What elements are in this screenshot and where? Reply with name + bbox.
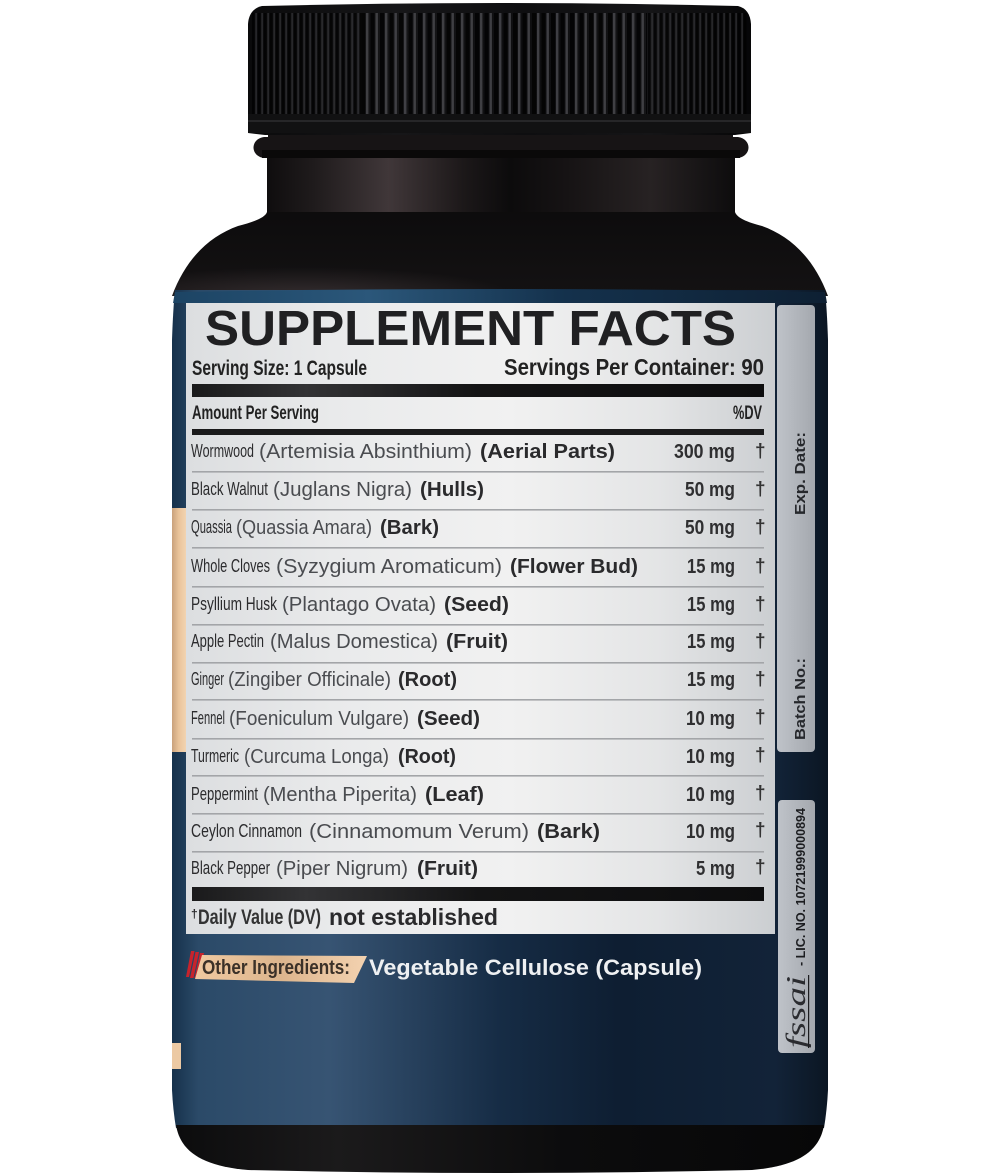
row: wormwood: [191, 441, 766, 463]
row: black pepper: (Piper Nigrum): [276, 858, 408, 880]
row: fennel: 10 mg: [686, 708, 735, 730]
row: ceylon cinnamon: 10 mg: [686, 821, 735, 843]
servings per container: Servings Per Container: 90: [504, 354, 764, 380]
footnote: Daily Value (DV): [198, 906, 321, 929]
row: ginger: [191, 669, 766, 691]
row: ceylon cinnamon: †: [755, 820, 766, 841]
row: fennel: [191, 707, 766, 730]
heavy rule: [192, 384, 764, 397]
row: ginger: (Root): [398, 669, 457, 691]
row: apple pectin: (Malus Domestica): [270, 631, 438, 653]
row: wormwood: 300 mg: [674, 441, 735, 463]
row: fennel: †: [755, 707, 766, 728]
row: black walnut: (Hulls): [420, 479, 484, 501]
other ingredients value: Vegetable Cellulose (Capsule): [369, 955, 702, 980]
other ingredients: [186, 951, 702, 983]
footnote: †: [191, 907, 198, 921]
percent daily value heading: %DV: [733, 403, 762, 424]
row: quassia: (Bark): [380, 517, 439, 539]
row: ceylon cinnamon: Ceylon Cinnamon: [191, 821, 302, 841]
row: peppermint: (Mentha Piperita): [263, 784, 417, 806]
row: whole cloves: 15 mg: [687, 556, 735, 578]
row: wormwood: (Artemisia Absinthium): [259, 441, 472, 463]
bottle body: [172, 289, 828, 1128]
row: black walnut: 50 mg: [685, 479, 735, 501]
bottle neck: [254, 132, 748, 212]
row: apple pectin: †: [755, 631, 766, 652]
footnote: [191, 904, 498, 930]
fssai logo: fssai: [781, 976, 811, 1048]
fssai logo: [781, 975, 811, 1048]
heavy rule bottom: [192, 887, 764, 901]
medium rule: [192, 429, 764, 435]
row: black walnut: [191, 479, 766, 501]
row: turmeric: [191, 745, 766, 768]
row: ginger: Ginger: [191, 669, 224, 689]
row: turmeric: 10 mg: [686, 746, 735, 768]
row: whole cloves: (Syzygium Aromaticum): [276, 556, 502, 578]
row: whole cloves: [191, 556, 766, 578]
other ingredients label: Other Ingredients:: [202, 957, 350, 979]
row: black pepper: †: [755, 857, 766, 878]
row: quassia: (Quassia Amara): [236, 517, 372, 539]
row: ginger: (Zingiber Officinale): [228, 669, 391, 691]
row: whole cloves: †: [755, 556, 766, 577]
row: quassia: [191, 517, 766, 539]
row: apple pectin: Apple Pectin: [191, 631, 264, 651]
panel: supplement facts label: [186, 302, 775, 934]
panel: fssai licence: [778, 800, 815, 1053]
row: wormwood: †: [755, 441, 766, 462]
batch number: Batch No.:: [792, 658, 809, 740]
expiry date: Exp. Date:: [792, 432, 809, 515]
row: apple pectin: [191, 631, 766, 653]
licence number: - LIC. NO. 10721999000894: [793, 807, 808, 966]
row: wormwood: (Aerial Parts): [480, 441, 615, 463]
row: ceylon cinnamon: [191, 820, 766, 843]
serving size: Serving Size: 1 Capsule: [192, 357, 367, 380]
panel: batch and expiry: [777, 305, 815, 752]
row: peppermint: [191, 783, 766, 806]
row: fennel: (Seed): [417, 708, 480, 730]
row: apple pectin: 15 mg: [687, 631, 735, 653]
row: peppermint: 10 mg: [686, 784, 735, 806]
row: peppermint: Peppermint: [191, 784, 258, 804]
row: ginger: 15 mg: [687, 669, 735, 691]
row: psyllium husk: Psyllium Husk: [191, 594, 278, 614]
bottle shoulder: [172, 205, 828, 296]
row: turmeric: Turmeric: [191, 746, 239, 766]
row: wormwood: Wormwood: [191, 441, 254, 461]
row: fennel: Fennel: [191, 708, 225, 728]
row: quassia: †: [755, 517, 766, 538]
row: whole cloves: Whole Cloves: [191, 556, 270, 576]
title: SUPPLEMENT FACTS: [205, 302, 736, 356]
row: ginger: †: [755, 669, 766, 690]
row: black pepper: (Fruit): [417, 858, 478, 880]
row: turmeric: †: [755, 745, 766, 766]
row: black pepper: Black Pepper: [191, 858, 270, 878]
tag background: [195, 955, 367, 983]
row: quassia: 50 mg: [685, 517, 735, 539]
bottle: [172, 3, 828, 1173]
row: peppermint: †: [755, 783, 766, 804]
row: black pepper: 5 mg: [696, 858, 735, 880]
row: psyllium husk: †: [755, 594, 766, 615]
bottle base: [176, 1125, 824, 1173]
row: black pepper: [191, 857, 766, 880]
row: turmeric: (Curcuma Longa): [244, 746, 389, 768]
peach strip upper: [172, 508, 186, 752]
row: black walnut: †: [755, 479, 766, 500]
row: turmeric: (Root): [398, 746, 456, 768]
amount per serving: Amount Per Serving: [192, 403, 319, 424]
icon: red slashes: [186, 951, 204, 978]
row: whole cloves: (Flower Bud): [510, 556, 638, 578]
row: psyllium husk: [191, 594, 766, 616]
row: ceylon cinnamon: (Cinnamomum Verum): [309, 821, 529, 843]
row: psyllium husk: 15 mg: [687, 594, 735, 616]
footnote: not established: [329, 904, 498, 930]
row: psyllium husk: (Plantago Ovata): [282, 594, 436, 616]
bottle cap: [248, 3, 751, 135]
peach strip lower: [172, 1043, 181, 1069]
row: ceylon cinnamon: (Bark): [537, 821, 600, 843]
row: peppermint: (Leaf): [425, 784, 484, 806]
row: black walnut: Black Walnut: [191, 479, 268, 499]
row: fennel: (Foeniculum Vulgare): [229, 708, 409, 730]
row: quassia: Quassia: [191, 517, 233, 537]
row: apple pectin: (Fruit): [446, 631, 508, 653]
row: black walnut: (Juglans Nigra): [273, 479, 412, 501]
row: psyllium husk: (Seed): [444, 594, 509, 616]
